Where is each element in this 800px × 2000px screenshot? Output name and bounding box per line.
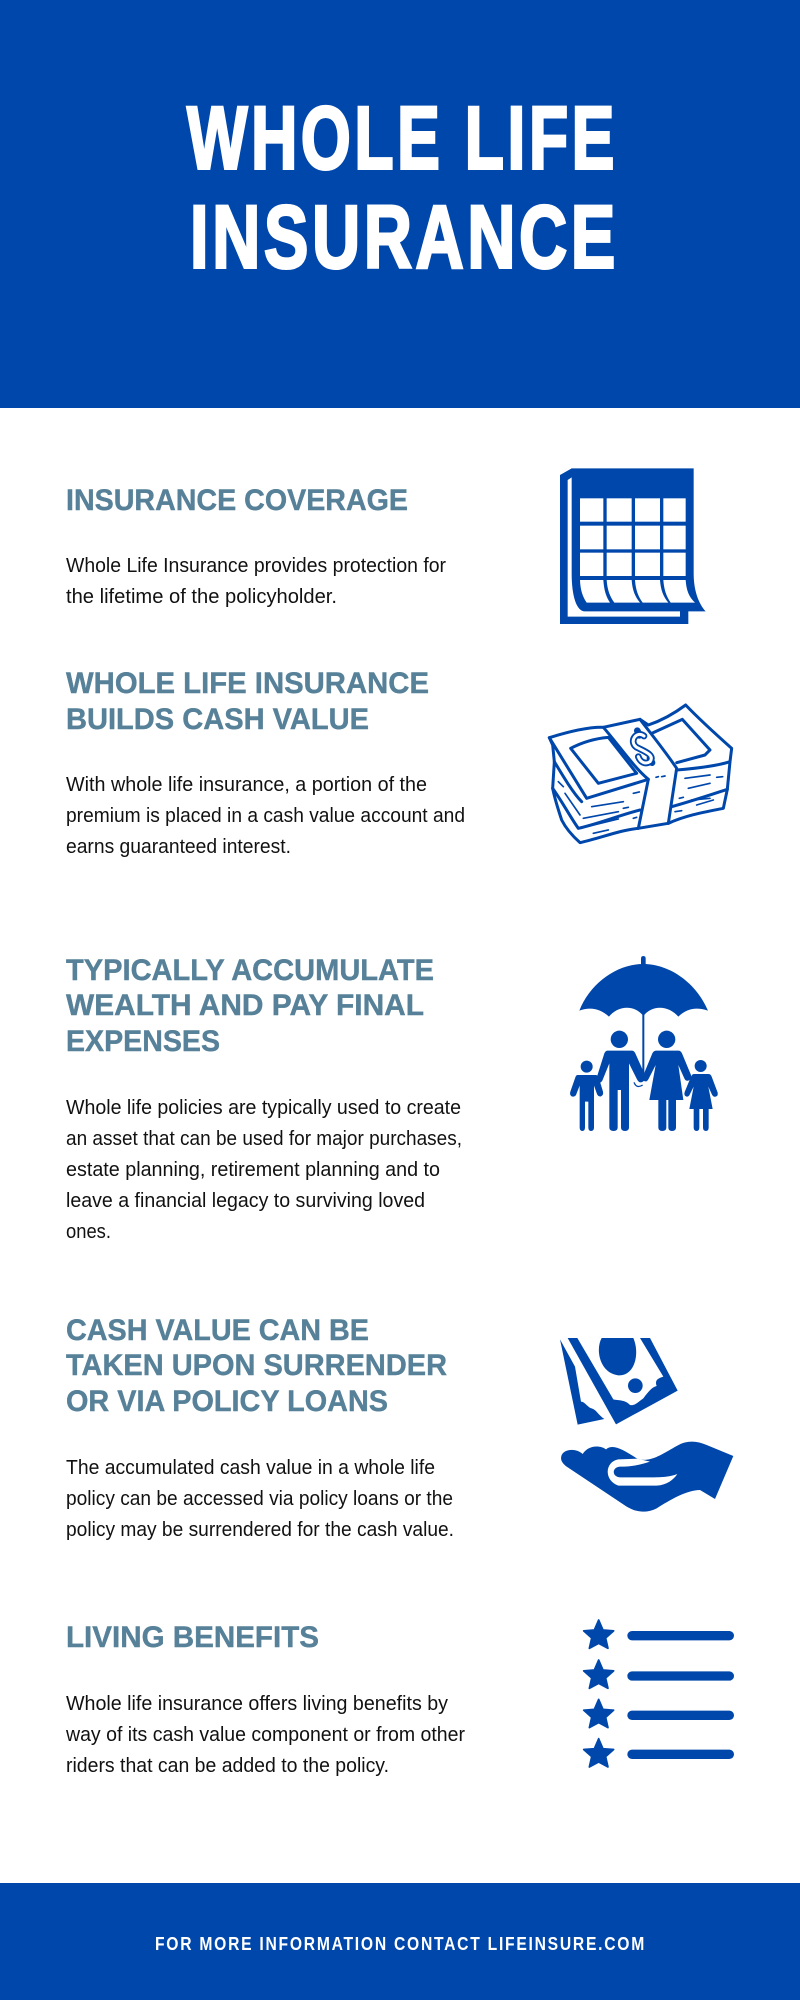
heading: cash value surrender: TAKEN UPON SURRENDER [66, 1349, 447, 1382]
heading: builds cash value [66, 667, 429, 736]
text block: builds cash value: earns guaranteed interest. [66, 836, 291, 858]
heading: cash value surrender [66, 1314, 447, 1418]
heading: cash value surrender: OR VIA POLICY LOANS [66, 1385, 388, 1418]
text block: living benefits: Whole life insurance offers living benefits by [66, 1693, 448, 1715]
text block: accumulate wealth [66, 1097, 462, 1243]
heading: cash value surrender: CASH VALUE CAN BE [66, 1314, 369, 1347]
icon: star list [584, 1620, 734, 1767]
footer text: FOR MORE INFORMATION CONTACT LIFEINSURE.COM [155, 1934, 646, 1954]
heading: insurance coverage: INSURANCE COVERAGE [66, 484, 408, 517]
text block: builds cash value: premium is placed in a cash value account and [66, 805, 465, 827]
title [187, 88, 619, 286]
text block: insurance coverage: the lifetime of the policyholder. [66, 586, 337, 608]
text block: accumulate wealth: Whole life policies are typically used to create [66, 1097, 461, 1119]
panel: insurance coverage [66, 468, 706, 624]
text block: accumulate wealth: estate planning, retirement planning and to [66, 1159, 440, 1181]
text block: living benefits: way of its cash value component or from other [65, 1724, 465, 1746]
panel: living benefits [65, 1620, 734, 1777]
footer banner [0, 1883, 800, 2000]
header banner [0, 0, 800, 408]
panel: accumulate wealth [66, 954, 718, 1243]
heading: builds cash value: BUILDS CASH VALUE [66, 703, 369, 736]
text block: insurance coverage: Whole Life Insurance provides protection for [66, 555, 446, 577]
icon: hand receiving money [560, 1338, 733, 1512]
icon: calendar [560, 468, 706, 624]
text block: living benefits: riders that can be added to the policy. [66, 1755, 389, 1777]
heading: accumulate wealth: EXPENSES [66, 1025, 220, 1058]
text block: insurance coverage [66, 555, 446, 608]
text block: living benefits [65, 1693, 465, 1777]
heading: accumulate wealth [66, 954, 434, 1058]
text block: cash value surrender: policy may be surrendered for the cash value. [66, 1519, 454, 1541]
heading: builds cash value: WHOLE LIFE INSURANCE [66, 667, 429, 700]
heading: living benefits: LIVING BENEFITS [66, 1621, 319, 1654]
text block: accumulate wealth: an asset that can be used for major purchases, [66, 1128, 462, 1150]
text block: accumulate wealth: leave a financial legacy to surviving loved [66, 1190, 425, 1212]
text block: builds cash value: With whole life insurance, a portion of the [66, 774, 427, 796]
panel: builds cash value [66, 667, 732, 858]
text block: accumulate wealth: ones. [66, 1221, 111, 1243]
text block: builds cash value [66, 774, 465, 858]
panel: cash value surrender [66, 1314, 733, 1541]
heading: accumulate wealth: TYPICALLY ACCUMULATE [66, 954, 434, 987]
icon: family under umbrella [570, 956, 718, 1131]
icon: stack of money [549, 705, 732, 843]
heading: accumulate wealth: WEALTH AND PAY FINAL [66, 989, 424, 1022]
title: INSURANCE [190, 186, 619, 286]
text block: cash value surrender: policy can be accessed via policy loans or the [66, 1488, 453, 1510]
text block: cash value surrender: The accumulated cash value in a whole life [66, 1457, 435, 1479]
text block: cash value surrender [66, 1457, 454, 1541]
title: WHOLE LIFE [187, 88, 618, 188]
